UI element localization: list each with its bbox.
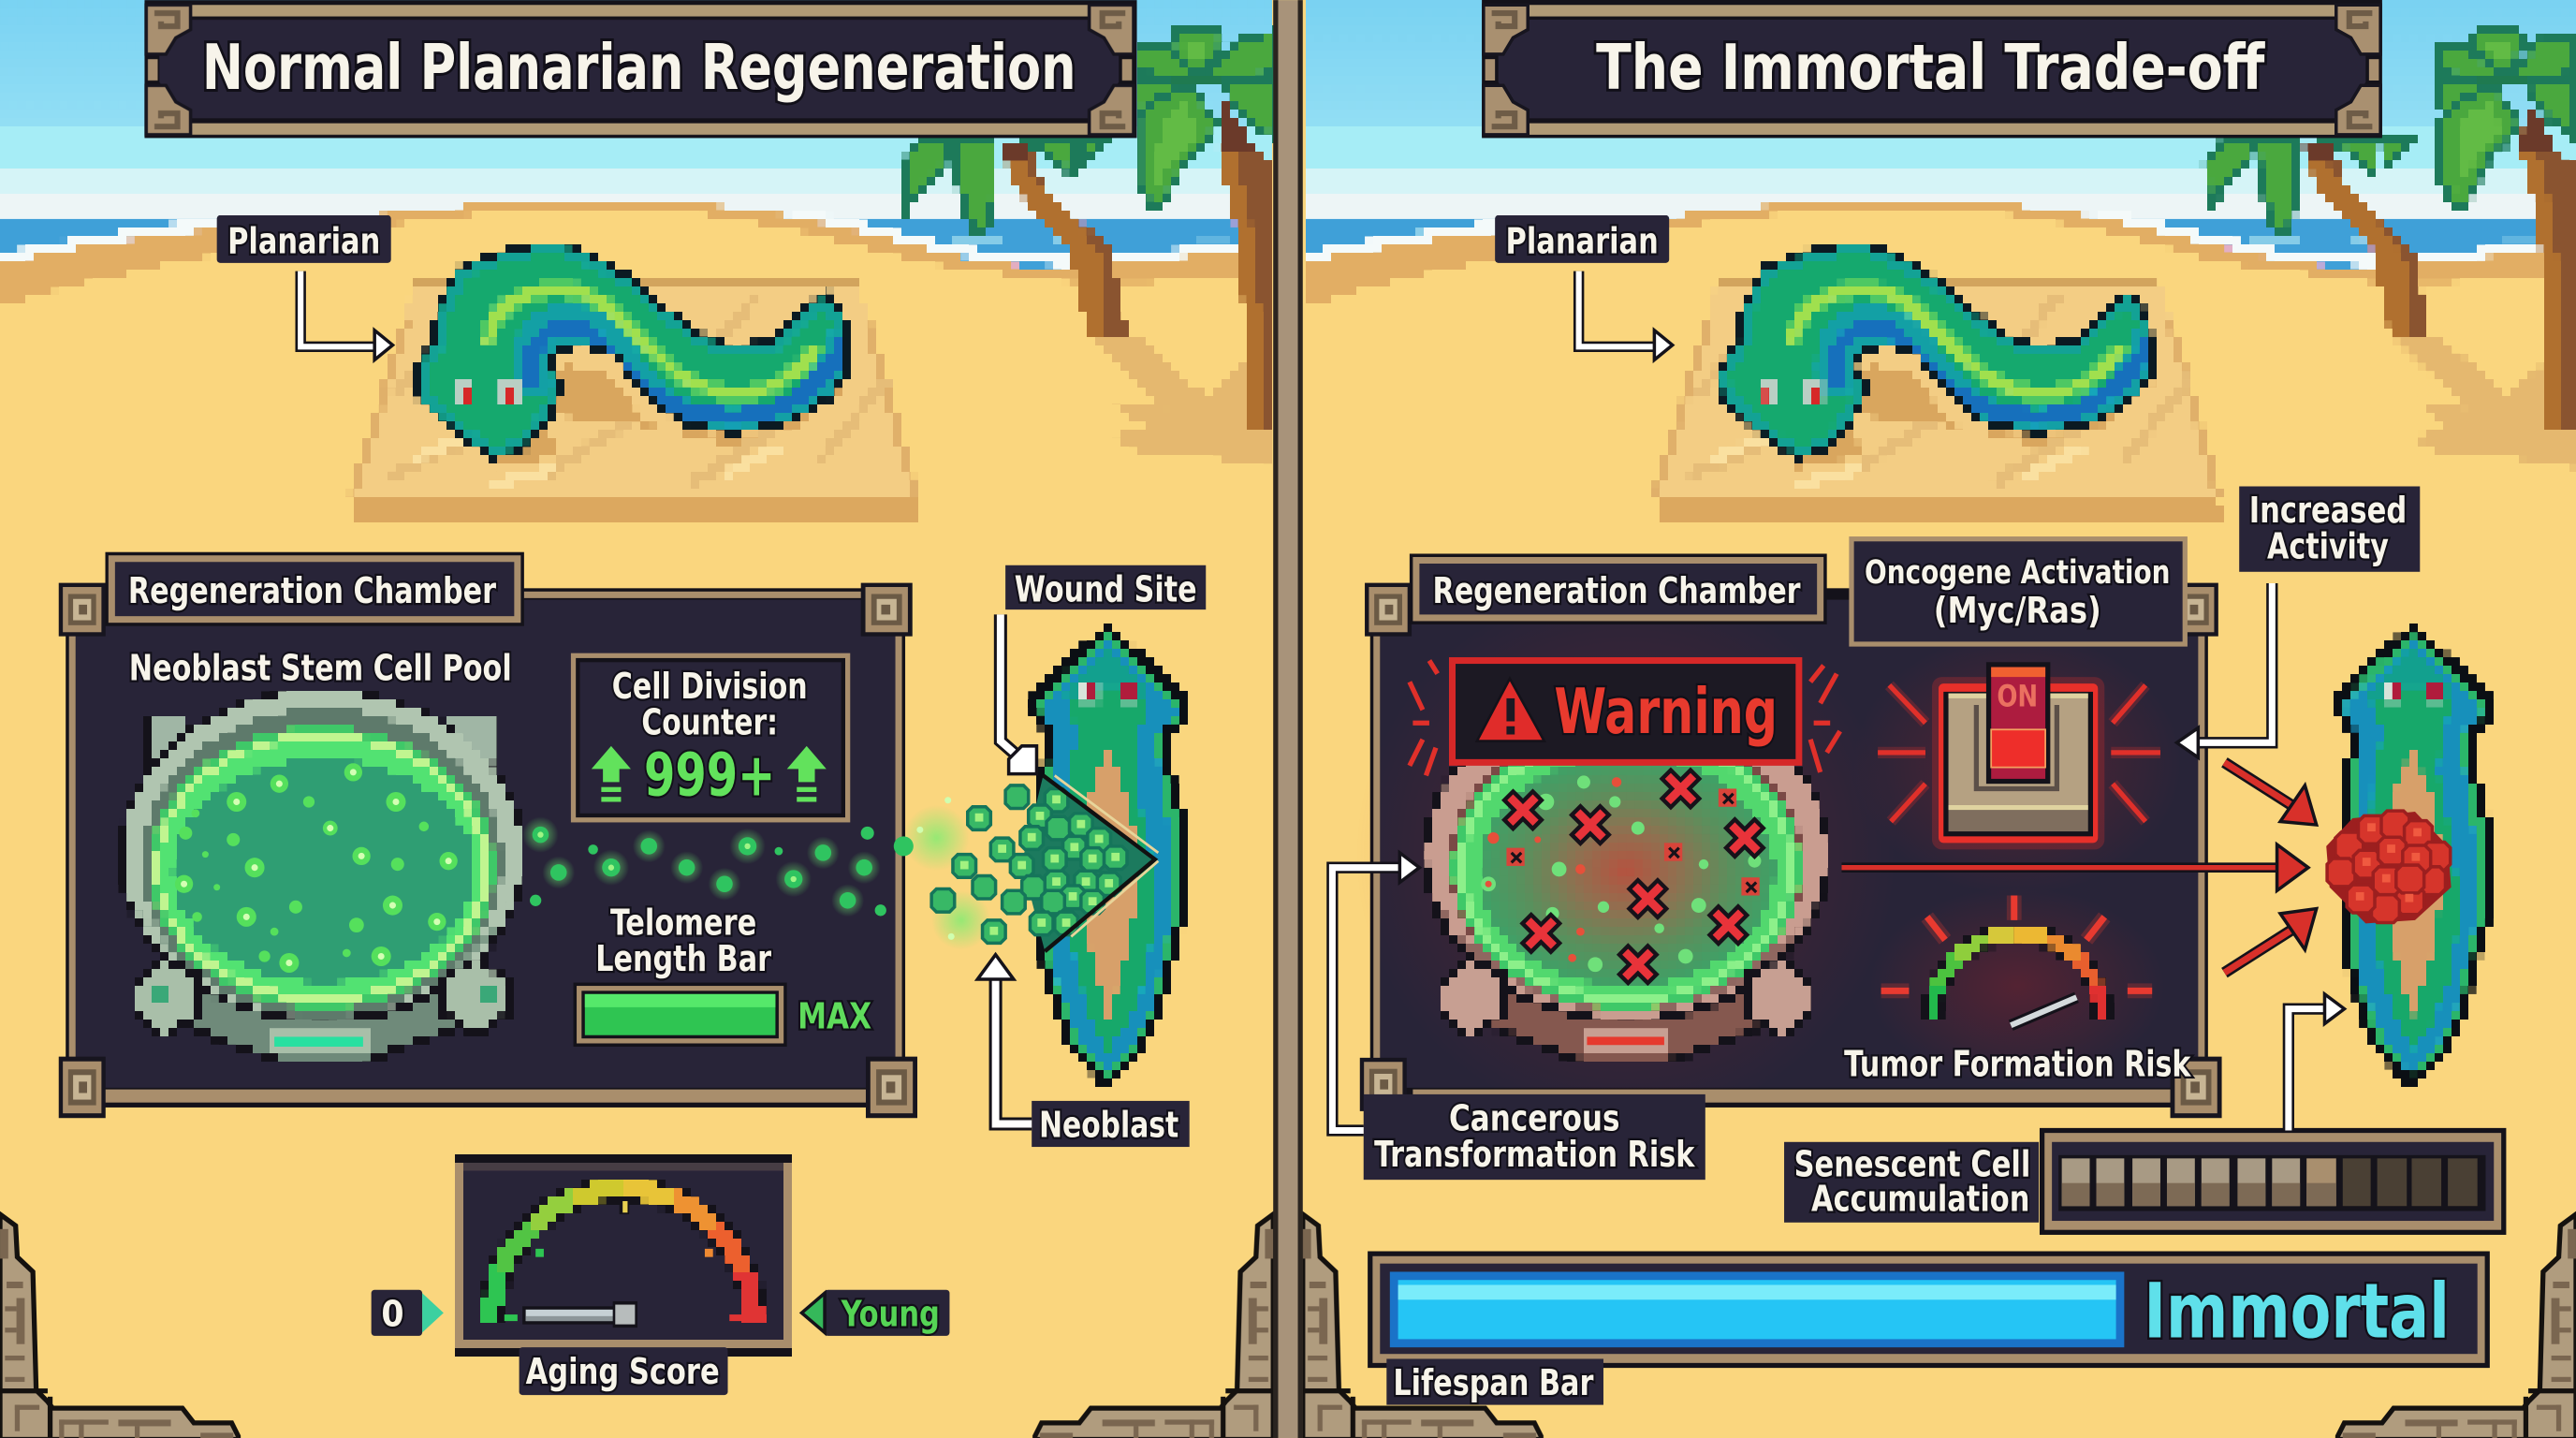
gauge rays bbox=[1881, 896, 2152, 990]
pool light right bbox=[1587, 1036, 1664, 1045]
title text: right: The Immortal Trade-off bbox=[1596, 31, 2266, 104]
oncogene switch bbox=[1932, 662, 2104, 849]
label: tumor formation risk: Tumor Formation Risk bbox=[1844, 1044, 2191, 1086]
label: wound site: Wound Site bbox=[1015, 568, 1197, 610]
label: telomere length bar: Telomere bbox=[610, 902, 756, 945]
title banner: right bbox=[1482, 0, 2382, 138]
label: cancerous transformation risk bbox=[1364, 1094, 1705, 1180]
oncogene activation label bbox=[1852, 539, 2185, 644]
heading plate: regeneration chamber left: Regeneration Chamber bbox=[128, 570, 497, 612]
warning sign bbox=[1453, 661, 1799, 762]
label: cancerous transformation risk: Transformation Risk bbox=[1374, 1134, 1695, 1176]
senescent cell accumulation: Accumulation bbox=[1811, 1179, 2029, 1221]
sand platform right bbox=[1656, 276, 2223, 520]
oncogene activation label: (Myc/Ras) bbox=[1934, 590, 2101, 632]
label: increased activity bbox=[2239, 487, 2420, 572]
label: neoblast stem cell pool: Neoblast Stem Cell Pool bbox=[129, 648, 512, 690]
label: planarian left: Planarian bbox=[227, 220, 380, 262]
cell division counter: Counter: bbox=[641, 702, 778, 744]
sand platform left bbox=[353, 276, 920, 520]
arrow: wound site bbox=[1001, 614, 1036, 774]
icon: green up arrow left bbox=[592, 746, 631, 801]
tumor risk gauge bbox=[1932, 933, 2103, 1019]
label: telomere length bar bbox=[595, 902, 772, 980]
neoblast dots in pool bbox=[175, 763, 458, 973]
cell division counter: Cell Division bbox=[612, 666, 808, 708]
pool light left bbox=[274, 1036, 363, 1047]
aging gauge ticks and needle bbox=[505, 1199, 742, 1328]
immortal planarian body bbox=[2336, 629, 2491, 1083]
label: increased activity: Activity bbox=[2267, 526, 2389, 568]
aging score value bbox=[372, 1290, 444, 1336]
arrow: planarian left bbox=[300, 271, 392, 360]
label: planarian right: Planarian bbox=[1506, 220, 1659, 262]
lower arrow bbox=[2224, 909, 2317, 973]
beach background left bbox=[0, 0, 1273, 1438]
heading plate: regeneration chamber right: Regeneration Chamber bbox=[1432, 570, 1801, 612]
switch ON text: ON bbox=[1997, 681, 2038, 714]
arrow: neoblast bbox=[977, 955, 1032, 1123]
panel: regeneration chamber left bbox=[61, 585, 915, 1116]
palm trees left bbox=[903, 28, 1273, 427]
upper arrow bbox=[2224, 762, 2317, 825]
label: neoblast: Neoblast bbox=[1039, 1105, 1178, 1147]
beach background right bbox=[1303, 0, 2576, 1438]
label: lifespan bar: Lifespan Bar bbox=[1393, 1362, 1594, 1404]
palm trees right bbox=[2206, 28, 2576, 427]
label: cancerous transformation risk: Cancerous bbox=[1449, 1098, 1620, 1140]
lifespan bar bbox=[1370, 1254, 2487, 1365]
chamber pixel art layer bbox=[118, 629, 2491, 1356]
switch rays bbox=[1878, 685, 2160, 822]
neoblast stem cell pool bbox=[118, 688, 526, 1064]
counter value: 999+ bbox=[644, 740, 775, 809]
small cancer cell squares bbox=[1506, 788, 1760, 896]
cancer cell markers bbox=[1513, 779, 1754, 975]
aging score value: 0 bbox=[381, 1293, 404, 1335]
warning rays bbox=[1410, 661, 1840, 775]
telomere length bar bbox=[574, 983, 787, 1047]
aging score state: Young bbox=[841, 1293, 940, 1335]
label: increased activity: Increased bbox=[2249, 490, 2407, 532]
senescent cell accumulation: Senescent Cell bbox=[1794, 1144, 2030, 1186]
warning text: Warning bbox=[1554, 675, 1778, 748]
label: aging score: Aging Score bbox=[526, 1351, 720, 1393]
red arrows to tumor bbox=[1841, 762, 2317, 973]
toggle lever bbox=[1986, 662, 2050, 784]
title text: left: Normal Planarian Regeneration bbox=[202, 31, 1076, 104]
center divider bbox=[1273, 0, 1303, 1438]
cell division counter bbox=[574, 655, 848, 820]
lifespan value: Immortal bbox=[2144, 1269, 2450, 1357]
arrow: planarian right bbox=[1579, 271, 1673, 360]
aging score state bbox=[801, 1290, 949, 1336]
aging score gauge bbox=[452, 1155, 794, 1356]
planarian worm right bbox=[1721, 248, 2159, 468]
icon: warning triangle bbox=[1477, 679, 1544, 741]
oncogene activation label: Oncogene Activation bbox=[1865, 553, 2170, 592]
senescent cell accumulation bbox=[1784, 1142, 2039, 1223]
telomere value: MAX bbox=[798, 996, 871, 1038]
warning pool bbox=[1423, 688, 1830, 1064]
tumor bbox=[2326, 811, 2452, 923]
long arrow bbox=[1841, 844, 2308, 890]
panel: regeneration chamber right bbox=[1355, 583, 2219, 1125]
wound notch with neoblast cluster bbox=[931, 775, 1158, 951]
pool contaminants bbox=[1481, 775, 1761, 972]
senescent cell bar bbox=[2042, 1131, 2504, 1232]
tumor gauge needle bbox=[2011, 997, 2076, 1025]
title banner: left bbox=[144, 0, 1137, 138]
wounded planarian bbox=[1032, 629, 1186, 1083]
arrow: cancerous risk bbox=[1332, 853, 1419, 1131]
stone border right bbox=[1303, 1214, 2576, 1438]
migrating neoblast particles bbox=[522, 797, 990, 949]
stone border left bbox=[0, 1214, 1273, 1438]
label: telomere length bar: Length Bar bbox=[595, 938, 772, 980]
icon: green up arrow right bbox=[787, 746, 827, 801]
arrow: increased activity bbox=[2177, 583, 2272, 757]
heading plate: regeneration chamber right bbox=[1412, 555, 1825, 623]
planarian worm left bbox=[417, 248, 855, 468]
heading plate: regeneration chamber left bbox=[107, 553, 522, 624]
arrow: senescent cells bbox=[2289, 994, 2345, 1131]
